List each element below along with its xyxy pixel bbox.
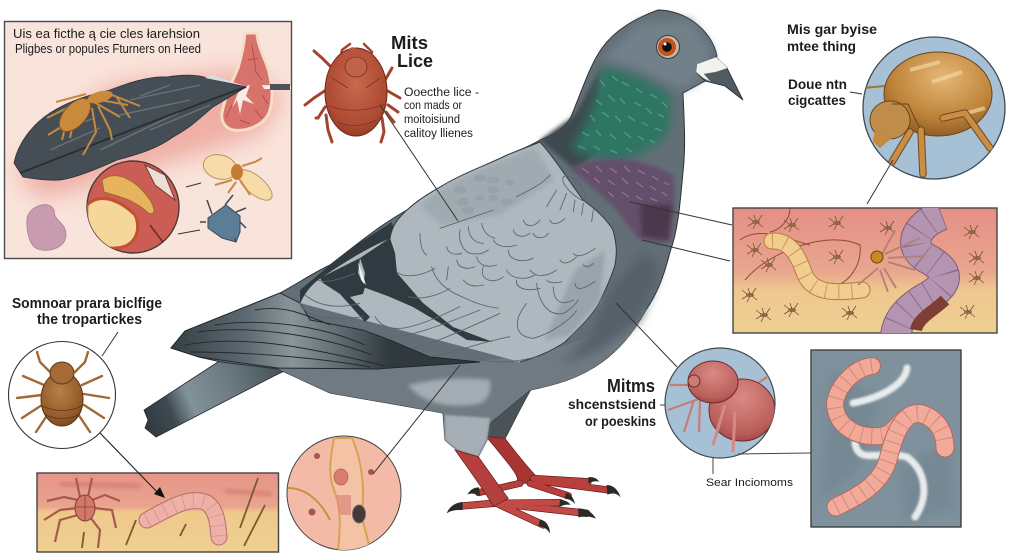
small mites scattered bbox=[742, 215, 984, 322]
beak bbox=[696, 57, 743, 100]
panel: pink worms bbox=[811, 350, 961, 527]
label: top right circle: cigcattes bbox=[788, 92, 846, 108]
neck purple iridescence bbox=[571, 159, 674, 242]
label: mitms: Mitms bbox=[607, 376, 655, 396]
icon: red louse bbox=[305, 44, 400, 142]
back leg (coordinates in zoom space) bbox=[467, 437, 621, 504]
text block: lice description: calitoy llienes bbox=[404, 128, 473, 140]
connector lines bbox=[178, 183, 201, 234]
heading: mits lice: Lice bbox=[397, 51, 433, 71]
dark neck-to-back shadow bbox=[540, 70, 600, 170]
dark wing bars bbox=[320, 258, 370, 322]
icon: blue tick bbox=[200, 195, 246, 242]
neck green iridescence bbox=[571, 66, 671, 162]
heading: bottom left: Somnoar prara biclfige bbox=[12, 295, 162, 312]
text block: lice description bbox=[404, 87, 479, 140]
icon: orange mite on feather bbox=[47, 88, 140, 155]
heading: mits lice: Mits bbox=[391, 33, 428, 53]
icon: pink organ lump bbox=[27, 205, 66, 250]
icon: winged insect bbox=[202, 154, 273, 201]
eye bbox=[656, 36, 680, 58]
icon: spider mite bbox=[44, 478, 120, 548]
heading: top right: mtee thing bbox=[787, 38, 856, 54]
lower belly bbox=[278, 306, 646, 457]
heading: bottom left bbox=[12, 295, 162, 328]
leader line: belly to mite bbox=[616, 303, 677, 367]
label: mitms: or poeskins bbox=[585, 414, 656, 429]
belly light patch bbox=[408, 378, 490, 406]
front thigh bbox=[445, 415, 490, 457]
text block: lice description: Ooecthe lice - bbox=[404, 87, 479, 99]
circle: brown tick bbox=[8, 342, 116, 448]
icon: magnified tissue circle bbox=[87, 161, 179, 253]
icon: pink maggot bbox=[147, 501, 219, 537]
heading: mits lice bbox=[391, 33, 433, 71]
pale worm tracks bbox=[853, 368, 924, 517]
icon: pale spider mite bbox=[858, 230, 925, 292]
light wing covert bbox=[300, 142, 616, 362]
text block: lice description: moitoisiund bbox=[404, 114, 460, 126]
head shading bbox=[602, 20, 712, 90]
leader line: thigh to circle bbox=[373, 365, 460, 474]
icon: grey feather bbox=[14, 75, 246, 180]
panel: skin with mite and maggot bbox=[37, 473, 278, 552]
primary wing feathers bbox=[171, 293, 480, 369]
leader lines: top right circle bbox=[850, 92, 893, 204]
arrow: circle to worm bbox=[100, 433, 165, 498]
body bbox=[171, 10, 717, 457]
leader line: lice to wing bbox=[380, 105, 458, 221]
scalloped feather lines bbox=[300, 175, 595, 362]
mantle mottling bbox=[420, 148, 555, 225]
illustration: pigeon bbox=[144, 10, 743, 533]
panel: skin with worms bbox=[733, 208, 997, 340]
circle: red mite bbox=[665, 348, 775, 458]
panel heading text: Pligbes or popuIes Fturners on Heed bbox=[15, 42, 201, 56]
label: mitms: shcenstsiend bbox=[568, 397, 656, 412]
label: top right circle bbox=[788, 76, 847, 108]
icon: purple worm bbox=[895, 215, 945, 340]
icon: yellow larva bbox=[772, 241, 862, 292]
front leg (coordinates in zoom space) bbox=[447, 450, 596, 533]
icon: first pink worm bbox=[835, 366, 902, 436]
heading: top right bbox=[787, 21, 877, 54]
panel: feather infestation inset bbox=[4, 22, 293, 258]
label: sear: Sear Inciomoms bbox=[706, 477, 794, 489]
leader line: heading to circle bbox=[102, 332, 118, 356]
heading: bottom left: the tropartickes bbox=[37, 311, 142, 328]
circle: tissue close-up bbox=[287, 436, 401, 552]
back leg thigh bbox=[486, 388, 532, 439]
label: mitms bbox=[568, 376, 656, 429]
hairs bbox=[82, 478, 265, 548]
leader lines: mite circle bbox=[660, 405, 811, 474]
text block: lice description: con mads or bbox=[404, 100, 462, 112]
label: top right circle: Doue ntn bbox=[788, 76, 847, 92]
icon: organ cross-section bbox=[222, 33, 293, 130]
tail bbox=[144, 360, 295, 437]
panel heading text bbox=[13, 26, 201, 56]
leader lines: neck to skin panel bbox=[630, 202, 732, 261]
panel heading text: Uis ea ficthe ą cie cles łarehsion bbox=[13, 26, 200, 41]
circle: golden mite bbox=[863, 37, 1005, 179]
heading: top right: Mis gar byise bbox=[787, 21, 877, 37]
icon: second pink worm bbox=[836, 413, 945, 507]
dark shoulder band bbox=[300, 222, 396, 303]
